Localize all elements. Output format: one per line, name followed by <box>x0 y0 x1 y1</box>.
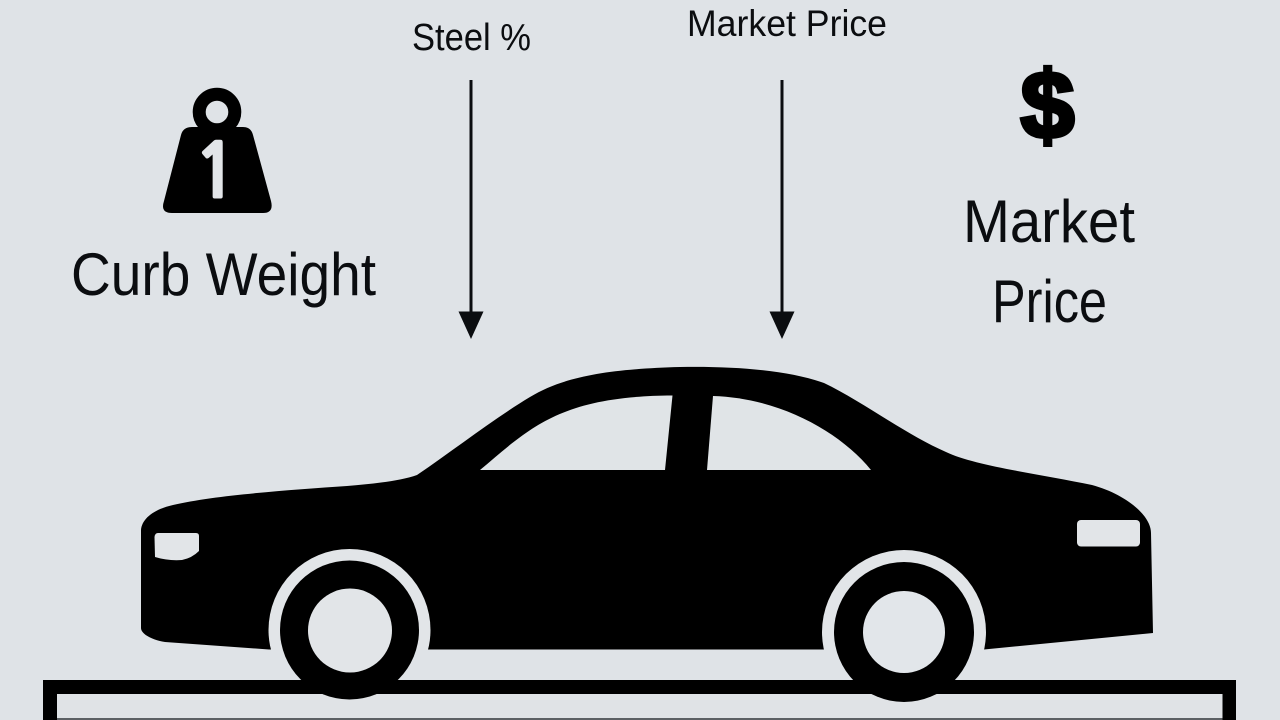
front window <box>480 396 672 470</box>
icon: weight: 1 <box>193 136 239 210</box>
label: market price right: Market <box>963 188 1135 255</box>
rear wheel <box>834 562 974 702</box>
front wheel arch <box>268 549 430 711</box>
arrow: steel percent <box>458 80 484 339</box>
icon: weight <box>163 94 272 213</box>
car <box>43 367 1236 720</box>
platform <box>43 680 1236 720</box>
label: market price top: Market Price <box>687 3 887 44</box>
arrow: market price <box>770 80 794 339</box>
ground gap under body <box>262 650 438 680</box>
rear window <box>707 396 871 470</box>
car body <box>141 367 1153 650</box>
icon: dollar sign: $ <box>1020 52 1074 159</box>
label: steel percent: Steel % <box>412 17 531 59</box>
tail light <box>1077 520 1140 546</box>
rear wheel arch <box>822 550 986 714</box>
label: market price right <box>963 188 1135 335</box>
headlight <box>154 533 199 560</box>
label: market price right: Price <box>992 268 1107 335</box>
front wheel <box>280 560 419 700</box>
label: curb weight: Curb Weight <box>71 241 376 308</box>
